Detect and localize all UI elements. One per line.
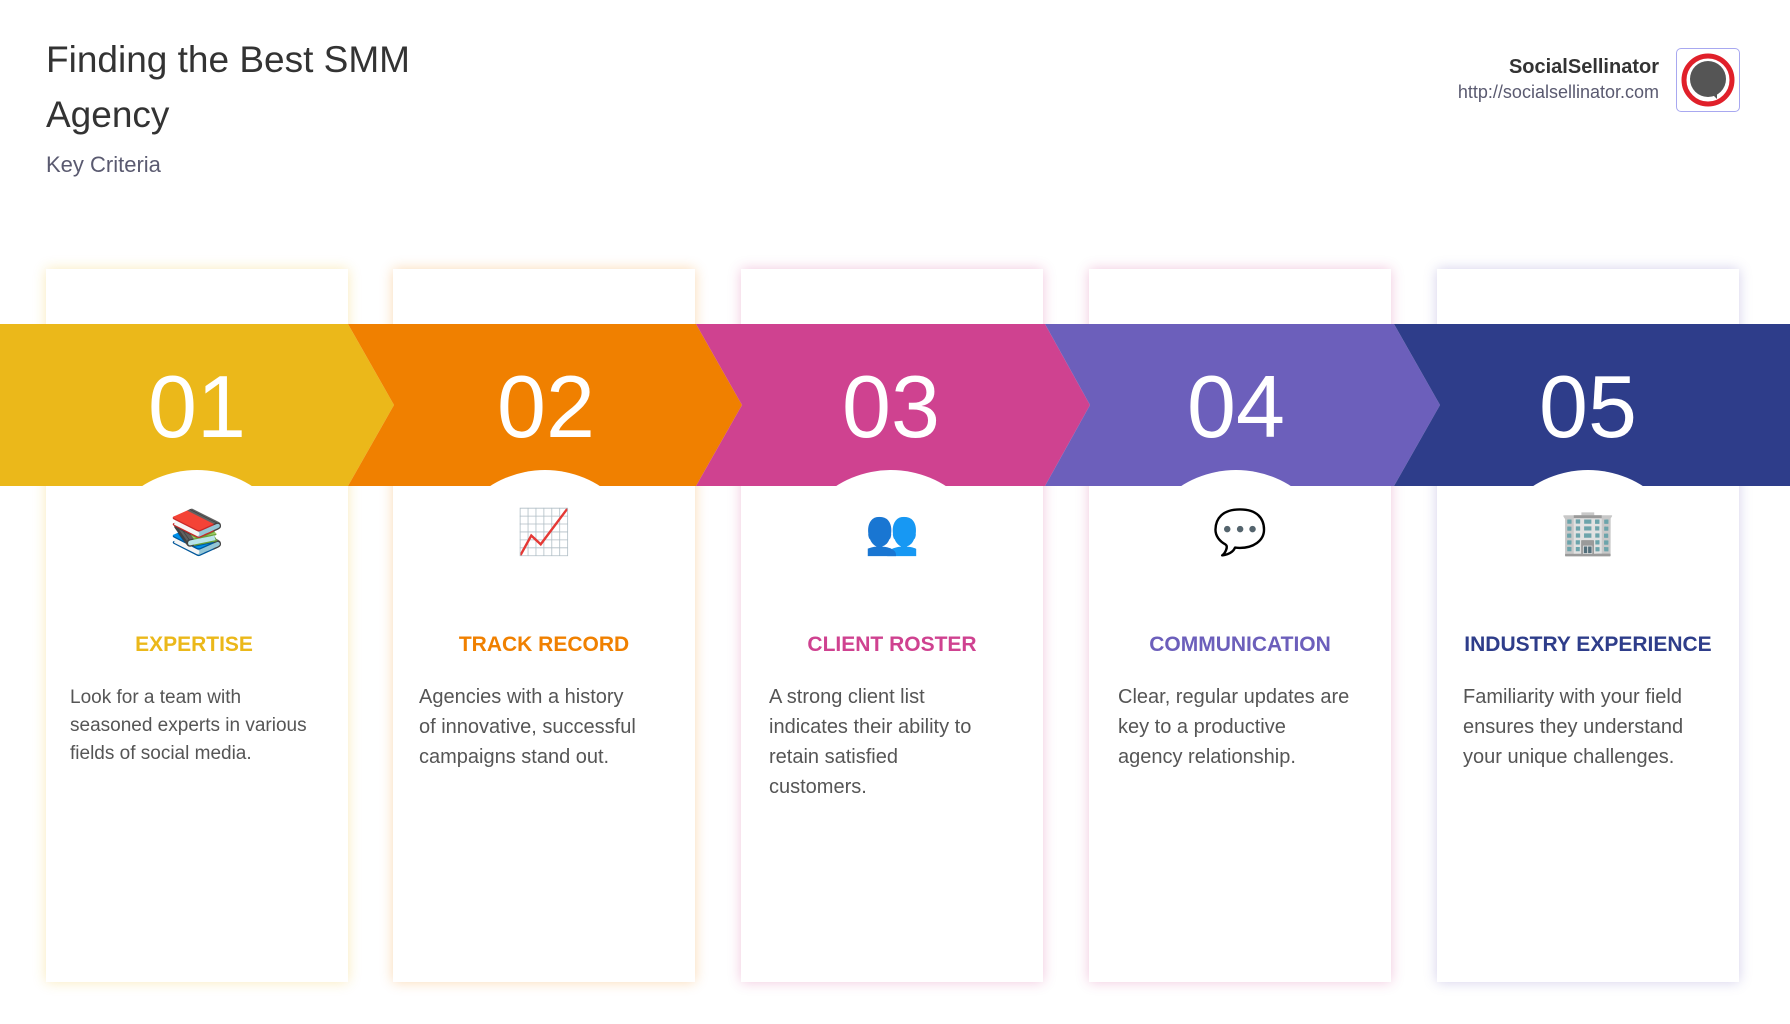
- step 4: [1118, 508, 1349, 768]
- title: [46, 39, 410, 135]
- brand text: SocialSellinator: [1509, 56, 1659, 78]
- text: 📚: [170, 508, 224, 557]
- text: your unique challenges.: [1463, 746, 1674, 768]
- text: Look for a team with: [70, 687, 241, 708]
- brand text: [1458, 56, 1659, 102]
- text: 📈: [517, 508, 571, 557]
- text: campaigns stand out.: [419, 746, 609, 768]
- logo: [1676, 48, 1740, 112]
- text: key to a productive: [1118, 716, 1286, 738]
- text: 04: [1187, 357, 1285, 456]
- bumps: [95, 470, 299, 674]
- text: customers.: [769, 776, 867, 798]
- title: Finding the Best SMM: [46, 39, 410, 80]
- text: Agencies with a history: [419, 686, 624, 708]
- numbers: 01: [148, 357, 246, 456]
- text: indicates their ability to: [769, 716, 971, 738]
- text: 05: [1539, 357, 1637, 456]
- text: 💬: [1213, 508, 1267, 557]
- cards: [46, 269, 348, 982]
- text: 03: [842, 357, 940, 456]
- text: CLIENT ROSTER: [807, 633, 977, 656]
- text: fields of social media.: [70, 743, 252, 764]
- brand text: http://socialsellinator.com: [1458, 82, 1659, 102]
- text: agency relationship.: [1118, 746, 1296, 768]
- text: seasoned experts in various: [70, 715, 307, 736]
- text: TRACK RECORD: [459, 633, 629, 656]
- title: Agency: [46, 94, 169, 135]
- text: 👥: [865, 508, 919, 557]
- step 5: [1463, 508, 1712, 768]
- subtitle: Key Criteria: [46, 152, 161, 177]
- text: ensures they understand: [1463, 716, 1683, 738]
- text: A strong client list: [769, 686, 925, 708]
- text: COMMUNICATION: [1149, 633, 1331, 656]
- text: of innovative, successful: [419, 716, 636, 738]
- text: Clear, regular updates are: [1118, 686, 1349, 708]
- step 1: [70, 508, 307, 764]
- text: Familiarity with your field: [1463, 686, 1682, 708]
- step 3: [769, 508, 977, 798]
- text: retain satisfied: [769, 746, 898, 768]
- step 2: [419, 508, 636, 768]
- text: EXPERTISE: [135, 633, 253, 656]
- text: 🏢: [1561, 508, 1615, 557]
- text: INDUSTRY EXPERIENCE: [1464, 633, 1712, 656]
- text: 02: [497, 357, 595, 456]
